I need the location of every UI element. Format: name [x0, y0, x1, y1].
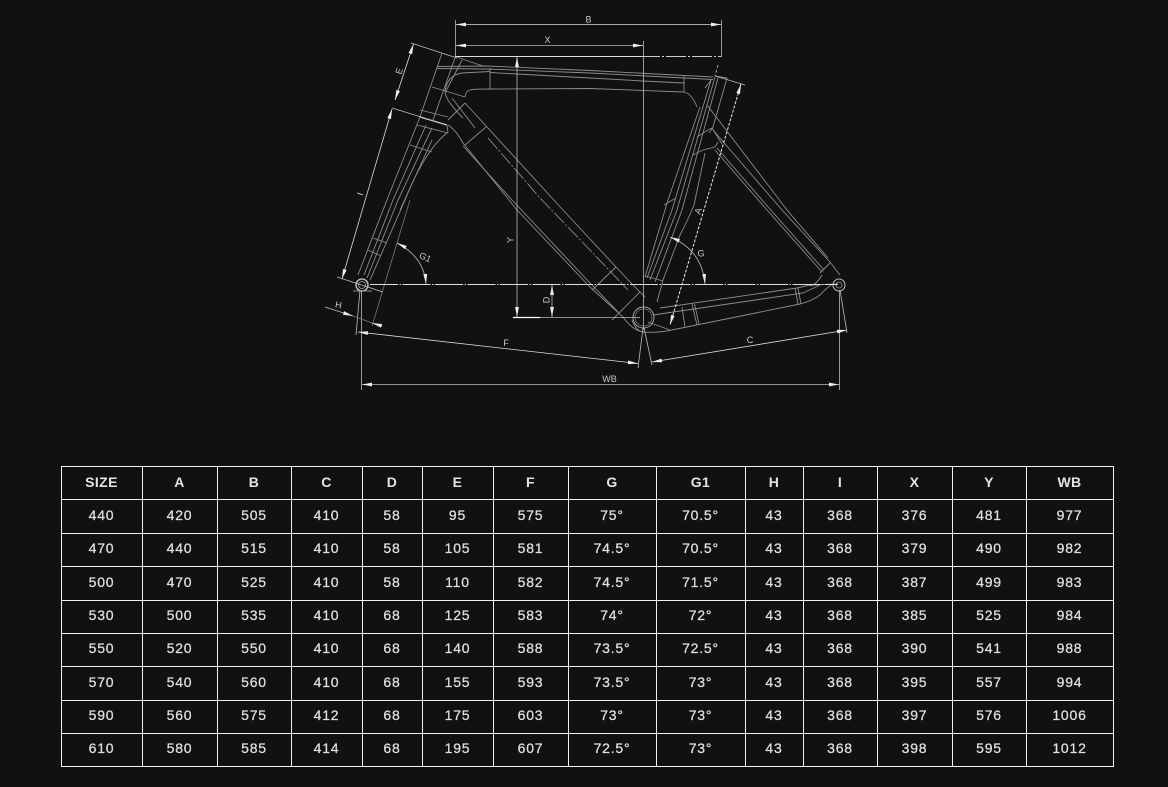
- geometry table: 376: [902, 507, 927, 523]
- geometry table: 58: [383, 507, 401, 523]
- bottom bracket: [633, 307, 654, 328]
- geometry table: WB: [1057, 474, 1082, 490]
- seat stays: [707, 105, 840, 286]
- geometry table: 490: [976, 540, 1002, 556]
- geometry table: 470: [167, 574, 192, 590]
- geometry table: 72.5°: [594, 740, 630, 756]
- extension lines: [337, 20, 847, 390]
- dimension D: D: [542, 296, 552, 303]
- geometry table: 155: [445, 674, 470, 690]
- geometry table: 984: [1057, 607, 1082, 623]
- dimension I: I: [355, 191, 365, 197]
- geometry table: 74°: [600, 607, 624, 623]
- geometry table: 580: [167, 740, 192, 756]
- dimension E: E: [393, 67, 405, 75]
- geometry table: 575: [518, 507, 543, 523]
- geometry table: 560: [241, 674, 267, 690]
- geometry table: 610: [89, 740, 114, 756]
- geometry table: 550: [89, 640, 114, 656]
- geometry table: SIZE: [85, 474, 118, 490]
- geometry table: 95: [449, 507, 466, 523]
- geometry table: 368: [827, 607, 853, 623]
- rear dropout: [833, 279, 845, 291]
- geometry table: H: [769, 474, 779, 490]
- bright crown line: [420, 117, 447, 125]
- geometry table: 595: [976, 740, 1002, 756]
- geometry table: 71.5°: [682, 574, 719, 590]
- dimension E: [393, 44, 414, 100]
- dimension F: F: [503, 338, 509, 348]
- geometry table: 68: [383, 640, 401, 656]
- geometry table: 410: [314, 607, 339, 623]
- geometry table: 500: [167, 607, 192, 623]
- geometry table: 582: [518, 574, 543, 590]
- dimension D: [542, 285, 552, 317]
- geometry table: 983: [1057, 574, 1082, 590]
- chain stay: [632, 284, 838, 332]
- geometry table: 988: [1057, 640, 1082, 656]
- dimension C: [652, 330, 847, 362]
- dimension F: [358, 332, 638, 364]
- head tube and fork crown: [410, 53, 486, 152]
- dimension WB: WB: [602, 374, 617, 384]
- geometry table: 68: [383, 740, 401, 756]
- geometry table: [61, 466, 1114, 767]
- geometry table: G: [606, 474, 618, 490]
- geometry table: 125: [445, 607, 470, 623]
- geometry table: 570: [89, 674, 114, 690]
- geometry table: 593: [518, 674, 543, 690]
- geometry table: 43: [765, 607, 783, 623]
- geometry table: I: [838, 474, 842, 490]
- geometry table: 410: [314, 540, 339, 556]
- geometry table: 500: [89, 574, 114, 590]
- geometry table: 58: [383, 574, 401, 590]
- geometry table: E: [453, 474, 462, 490]
- geometry table: 410: [314, 507, 339, 523]
- dimension A: [670, 84, 741, 325]
- geometry table: 420: [167, 507, 192, 523]
- geometry table: 43: [765, 640, 783, 656]
- geometry table: 440: [89, 507, 114, 523]
- geometry table: 530: [89, 607, 114, 623]
- geometry table: 368: [827, 740, 853, 756]
- seat tube: [645, 77, 718, 302]
- geometry table: 470: [89, 540, 114, 556]
- geometry table: 73°: [600, 707, 624, 723]
- geometry table: 73°: [689, 707, 712, 723]
- geometry table: 368: [827, 507, 853, 523]
- geometry table: 520: [167, 640, 192, 656]
- geometry table: 105: [445, 540, 470, 556]
- geometry table: 575: [241, 707, 267, 723]
- geometry table: 525: [241, 574, 267, 590]
- geometry table: C: [321, 474, 332, 490]
- geometry table: 385: [902, 607, 927, 623]
- geometry table: 414: [314, 740, 339, 756]
- geometry table: Y: [984, 474, 994, 490]
- dimension A: A: [692, 207, 704, 215]
- geometry table: 43: [765, 574, 783, 590]
- geometry table: 368: [827, 707, 853, 723]
- geometry table: 368: [827, 640, 853, 656]
- geometry table: 581: [518, 540, 543, 556]
- geometry table: 74.5°: [594, 574, 630, 590]
- geometry table: B: [249, 474, 259, 490]
- geometry table: 368: [827, 540, 853, 556]
- geometry table: 440: [167, 540, 192, 556]
- geometry table: 607: [518, 740, 543, 756]
- geometry table: 977: [1057, 507, 1082, 523]
- dimension X: X: [544, 35, 551, 45]
- geometry table: 43: [765, 740, 783, 756]
- geometry table: 412: [314, 707, 339, 723]
- geometry table: F: [526, 474, 535, 490]
- centre lines: [370, 56, 838, 284]
- geometry table: 398: [902, 740, 927, 756]
- geometry table: 43: [765, 507, 783, 523]
- dimension B: B: [585, 14, 592, 24]
- geometry table: 68: [383, 607, 401, 623]
- seat mast and stay junction: [693, 76, 727, 155]
- geometry table: G1: [691, 474, 710, 490]
- geometry table: 70.5°: [682, 507, 719, 523]
- geometry table: 505: [241, 507, 267, 523]
- dimension G1: G1: [418, 250, 433, 264]
- dimension G1: [397, 243, 433, 284]
- geometry table: X: [910, 474, 919, 490]
- geometry table: 560: [167, 707, 192, 723]
- geometry table: 368: [827, 674, 853, 690]
- fork legs: [358, 117, 447, 280]
- geometry table: 70.5°: [682, 540, 719, 556]
- geometry table: 395: [902, 674, 927, 690]
- geometry table: 68: [383, 674, 401, 690]
- geometry table: 43: [765, 707, 783, 723]
- geometry table: 525: [976, 607, 1002, 623]
- geometry table: 583: [518, 607, 543, 623]
- geometry table: 75°: [600, 507, 624, 523]
- geometry table: 541: [976, 640, 1002, 656]
- geometry table: 74.5°: [594, 540, 630, 556]
- geometry table: 535: [241, 607, 267, 623]
- geometry table: 585: [241, 740, 267, 756]
- geometry table: 540: [167, 674, 192, 690]
- dimension C: C: [747, 335, 754, 345]
- geometry table: 110: [445, 574, 470, 590]
- geometry table: 515: [241, 540, 267, 556]
- geometry table: 499: [976, 574, 1002, 590]
- geometry table: D: [387, 474, 397, 490]
- dimension Y: Y: [506, 237, 516, 243]
- geometry table: 175: [445, 707, 470, 723]
- geometry table: 481: [976, 507, 1002, 523]
- geometry table: 73°: [689, 674, 712, 690]
- front dropout: [353, 279, 372, 291]
- geometry table: 140: [445, 640, 470, 656]
- dimension I: [342, 109, 392, 279]
- geometry table: 72.5°: [682, 640, 719, 656]
- geometry table: 1012: [1052, 740, 1087, 756]
- geometry table: 379: [902, 540, 927, 556]
- top tube: [437, 57, 713, 107]
- geometry table: 368: [827, 574, 853, 590]
- geometry table: 68: [383, 707, 401, 723]
- geometry table: 397: [902, 707, 927, 723]
- dimension H: [325, 300, 382, 326]
- frame geometry drawing: [324, 14, 848, 390]
- bike frame outline: [353, 53, 845, 332]
- geometry table: 73°: [689, 740, 712, 756]
- geometry table: 410: [314, 674, 339, 690]
- geometry table: 576: [976, 707, 1002, 723]
- dimension H: H: [334, 300, 343, 311]
- geometry table: 58: [383, 540, 401, 556]
- geometry table: 43: [765, 540, 783, 556]
- geometry table: 994: [1057, 674, 1082, 690]
- geometry table: 550: [241, 640, 267, 656]
- geometry table: 603: [518, 707, 543, 723]
- geometry table: 195: [445, 740, 470, 756]
- geometry table: 557: [976, 674, 1002, 690]
- geometry table: 590: [89, 707, 114, 723]
- geometry table: 73.5°: [594, 640, 630, 656]
- geometry table: 410: [314, 640, 339, 656]
- dimension G: G: [697, 248, 705, 258]
- geometry table: 982: [1057, 540, 1082, 556]
- dimension lines: [325, 14, 847, 390]
- geometry table: A: [174, 474, 185, 490]
- geometry table: 72°: [689, 607, 712, 623]
- geometry table: 1006: [1052, 707, 1087, 723]
- down tube: [448, 103, 645, 332]
- geometry table: 410: [314, 574, 339, 590]
- geometry table: 390: [902, 640, 927, 656]
- dimension G: [670, 237, 705, 284]
- geometry table: 73.5°: [594, 674, 630, 690]
- geometry table: 43: [765, 674, 783, 690]
- geometry table: 387: [902, 574, 927, 590]
- geometry table: 588: [518, 640, 543, 656]
